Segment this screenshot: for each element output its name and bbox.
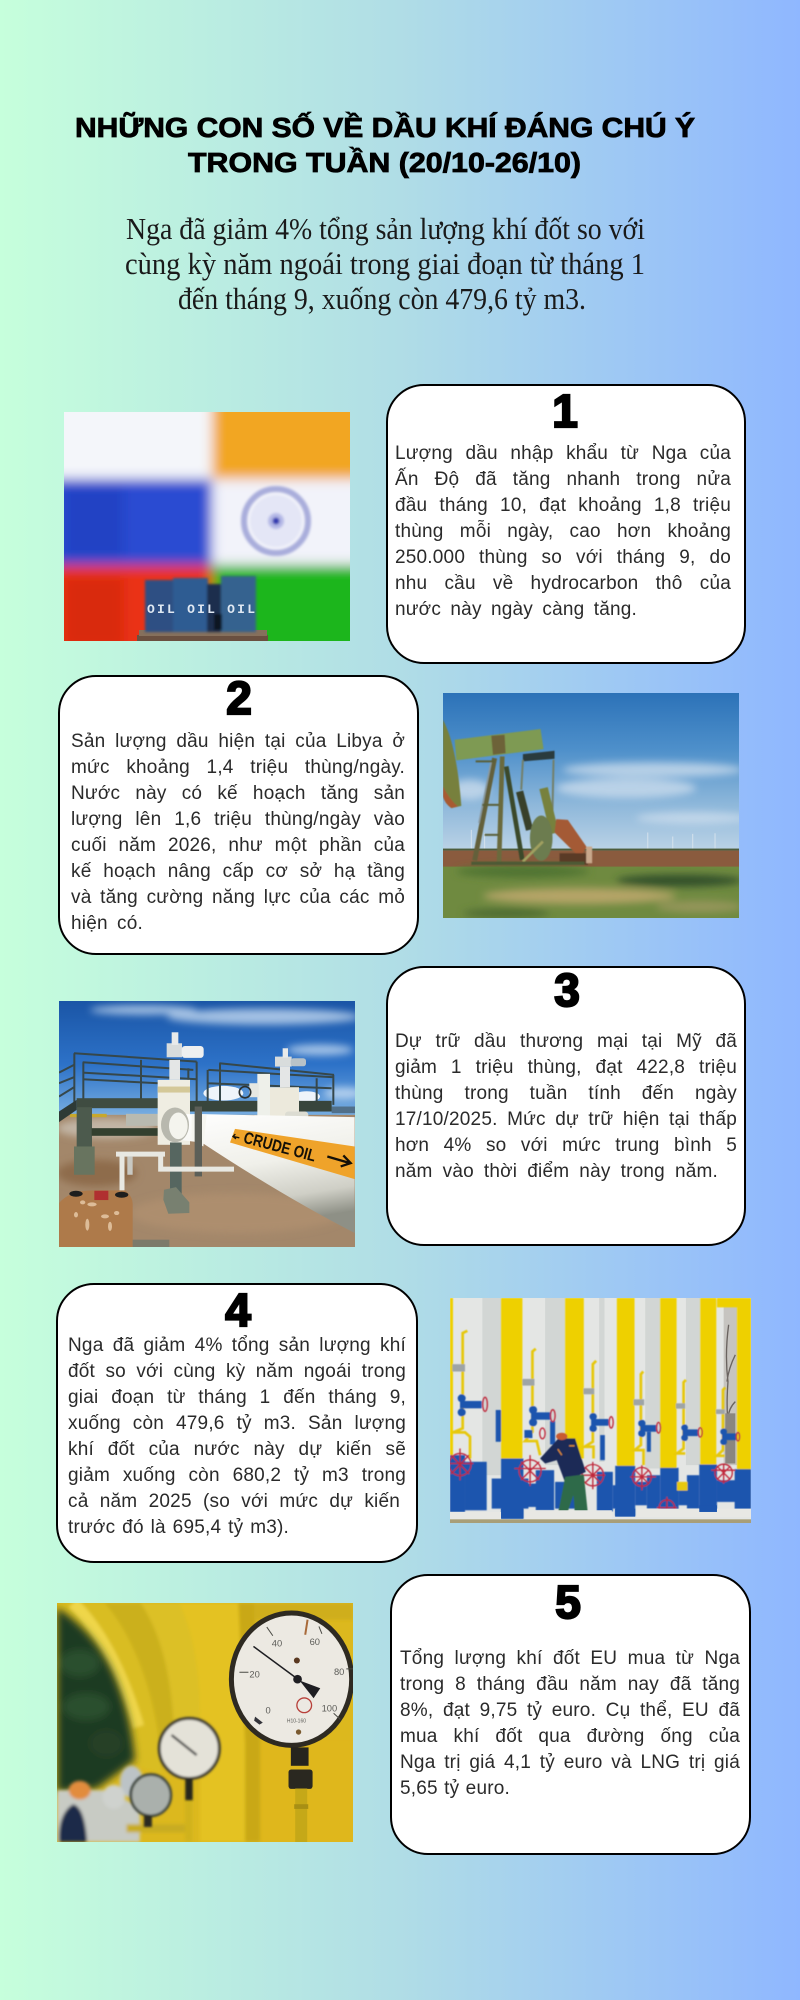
text block 2: kế hoạch nâng cấp cơ sở hạ tầng [71, 861, 405, 882]
text block 3: năm vào thời điểm này trong năm. [395, 1161, 718, 1182]
text block 5: 5,65 tỷ euro. [400, 1778, 510, 1799]
text block 1: nhu cầu về hydrocarbon thô của [395, 573, 731, 594]
text block 1: nước này ngày càng tăng. [395, 599, 637, 620]
number 1: 1 [552, 385, 578, 437]
text block 1: 250.000 thùng so với tháng 9, do [395, 547, 731, 568]
image: pressure gauges and yellow pipes: Н10-160 [287, 1718, 306, 1724]
text block 4: trước đó là 695,4 tỷ m3). [68, 1517, 289, 1538]
panel: item 1 [386, 384, 746, 664]
text block 3: Dự trữ dầu thương mại tại Mỹ đã [395, 1031, 737, 1052]
title: TRONG TUẦN (20/10-26/10) [188, 147, 581, 178]
text block 5: trong 8 tháng đầu năm nay đã tăng [400, 1674, 740, 1695]
image: Russia and India flags with oil barrels: OIL OIL OIL [147, 602, 255, 617]
text block 2: mức khoảng 1,4 triệu thùng/ngày. [71, 757, 405, 778]
text block 4: khí đốt của nước này dự kiến sẽ [68, 1439, 406, 1460]
text block 1: Lượng dầu nhập khẩu từ Nga của [395, 443, 731, 464]
panel: item 5 [390, 1574, 751, 1855]
text block 4 [68, 1335, 406, 1538]
image: pressure gauges and yellow pipes: 40 [272, 1638, 282, 1648]
image: gas station yellow pipes and worker [450, 1298, 751, 1523]
number 2: 2 [226, 672, 252, 724]
text block 3 [395, 1031, 737, 1182]
text block 3: 17/10/2025. Mức dự trữ hiện tại thấp [395, 1109, 737, 1130]
text block 2: và tăng cường năng lực của các mỏ [71, 887, 405, 908]
image: oil pumpjack in a field [443, 693, 739, 918]
text block 1: đầu tháng 10, đạt khoảng 1,8 triệu [395, 495, 731, 516]
text block 4: Nga đã giảm 4% tổng sản lượng khí [68, 1335, 406, 1356]
text block 4: xuống còn 479,6 tỷ m3. Sản lượng [68, 1413, 406, 1434]
title: NHỮNG CON SỐ VỀ DẦU KHÍ ĐÁNG CHÚ Ý [75, 111, 695, 143]
text block 2: Sản lượng dầu hiện tại của Libya ở [71, 731, 405, 752]
number 3: 3 [554, 964, 580, 1016]
image: crude oil pipeline [59, 1001, 355, 1247]
text block 1 [395, 443, 731, 620]
text block 1: thùng mỗi ngày, cao hơn khoảng [395, 521, 731, 542]
text block 5: Nga trị giá 4,1 tỷ euro và LNG trị giá [400, 1752, 740, 1773]
text block 5 [400, 1648, 740, 1799]
text block 4: cả năm 2025 (so với mức dự kiến [68, 1491, 400, 1512]
text block 2: Nước này có kế hoạch tăng sản [71, 783, 405, 804]
image: Russia and India flags with oil barrels [64, 412, 350, 641]
image: pressure gauges and yellow pipes: 60 [310, 1637, 320, 1647]
text block 2: cuối năm 2026, như một phần của [71, 835, 405, 856]
text block 5: Tổng lượng khí đốt EU mua từ Nga [400, 1648, 740, 1669]
image: pressure gauges and yellow pipes: 0 [265, 1706, 271, 1716]
text block 3: thùng trong tuần tính đến ngày [395, 1083, 737, 1104]
text block 1: Ấn Độ đã tăng nhanh trong nửa [395, 469, 731, 490]
text block 3: giảm 1 triệu thùng, đạt 422,8 triệu [395, 1057, 737, 1078]
text block 3: hơn 4% so với mức trung bình 5 [395, 1135, 737, 1156]
image: pressure gauges and yellow pipes: 80 [334, 1667, 344, 1677]
text block 2: hiện có. [71, 913, 143, 934]
image: pressure gauges and yellow pipes: 20 [249, 1670, 260, 1680]
text block 2: lượng lên 1,6 triệu thùng/ngày vào [71, 809, 405, 830]
title [75, 111, 696, 178]
image: pressure gauges and yellow pipes: 100 [322, 1704, 337, 1714]
number 5: 5 [555, 1576, 581, 1628]
image: crude oil pipeline: CRUDE OIL [242, 1128, 318, 1165]
number 4: 4 [225, 1284, 251, 1336]
panel: item 2 [58, 675, 419, 955]
panel: item 4 [56, 1283, 418, 1563]
text block 4: đốt so với cùng kỳ năm ngoái trong [68, 1361, 406, 1382]
subtitle [125, 211, 645, 316]
panel: item 3 [386, 966, 746, 1246]
text block 4: giảm xuống còn 680,2 tỷ m3 trong [68, 1465, 406, 1486]
text block 4: giai đoạn từ tháng 1 đến tháng 9, [68, 1387, 406, 1408]
text block 5: 8%, đạt 9,75 tỷ euro. Cụ thể, EU đã [400, 1700, 740, 1721]
image: pressure gauges and yellow pipes [57, 1603, 353, 1842]
subtitle: đến tháng 9, xuống còn 479,6 tỷ m3. [178, 281, 586, 316]
text block 2 [71, 731, 405, 934]
text block 5: mua khí đốt qua đường ống của [400, 1726, 740, 1747]
